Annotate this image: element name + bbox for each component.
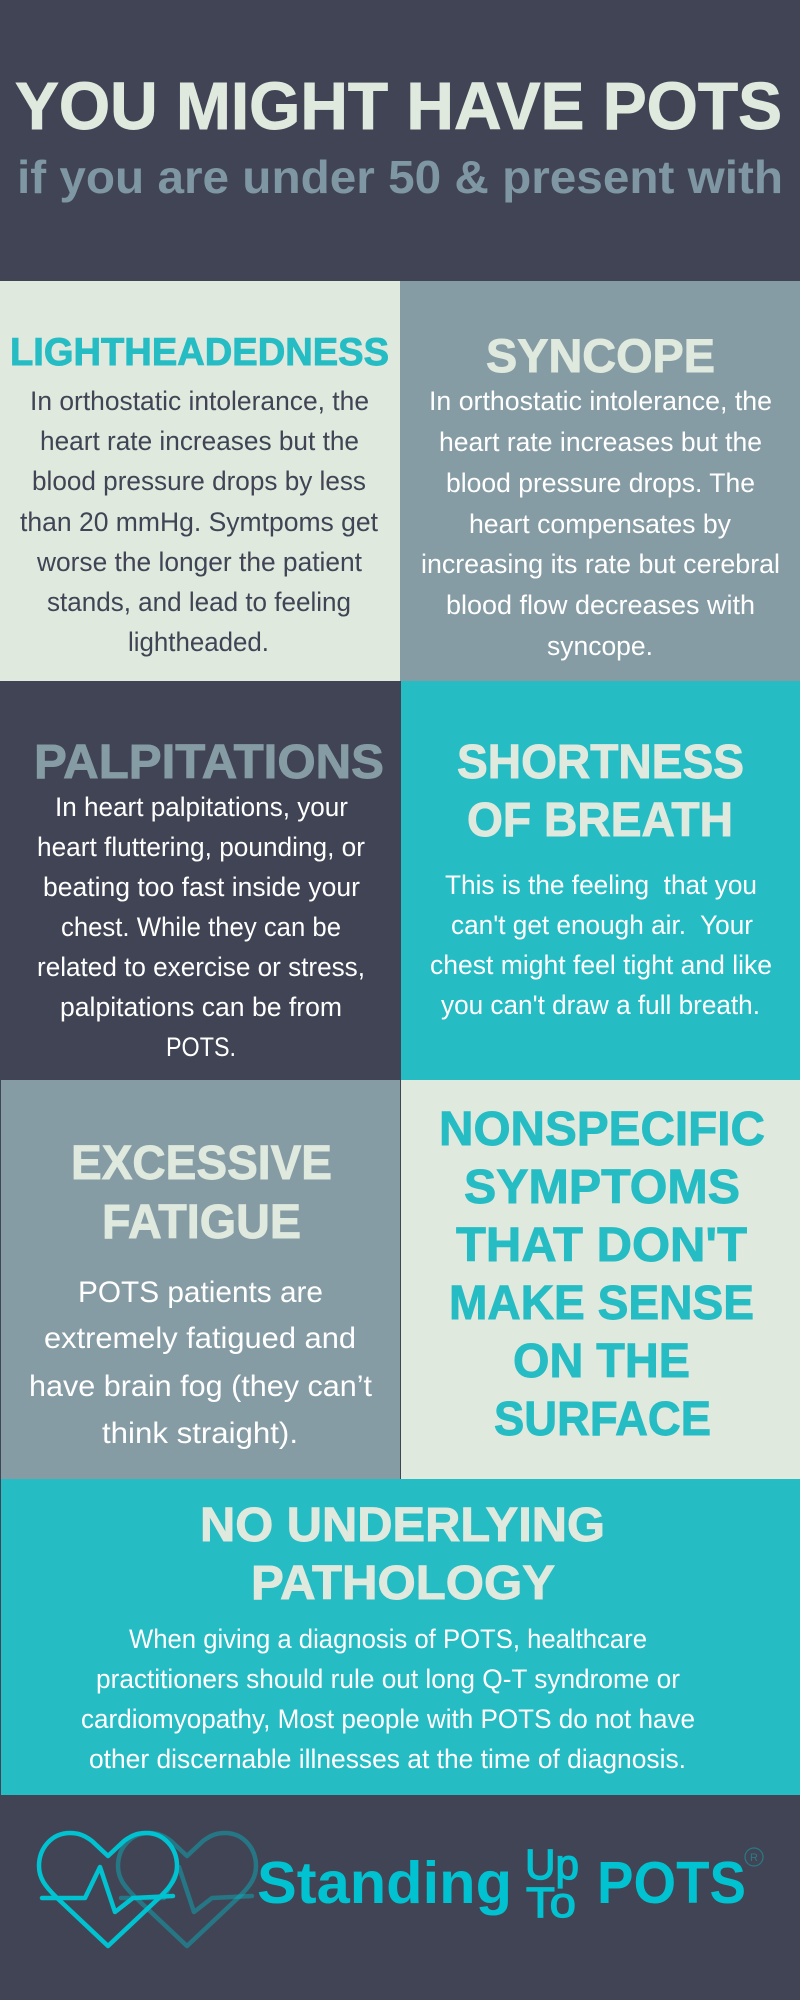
text block: palpitations: POTS. [166,1032,236,1062]
text block: excessive fatigue: extremely fatigued and [44,1322,356,1355]
heading: syncope: SYNCOPE [486,329,715,382]
heading: nonspecific symptoms: SYMPTOMS [464,1161,740,1214]
text block: lightheadedness: blood pressure drops by less [32,466,366,496]
icon: bright heart with pulse [39,1833,177,1946]
text block: syncope: heart compensates by [469,509,731,539]
text block: no underlying pathology: other discernable illnesses at the time of diagnosis. [89,1744,686,1774]
text block: excessive fatigue: think straight). [102,1417,298,1450]
text block: lightheadedness [20,386,378,657]
text block: palpitations: palpitations can be from [60,992,342,1022]
logo wordmark: To [526,1879,576,1927]
text block: shortness of breath: This is the feeling that you [445,870,757,900]
panel: no underlying pathology [1,1479,800,1795]
text block: lightheadedness: heart rate increases but the [40,426,359,456]
text block: palpitations: chest. While they can be [61,912,341,942]
text block: lightheadedness: In orthostatic intolerance, the [30,386,369,416]
logo wordmark [257,1841,746,1927]
registered mark: R [750,1852,758,1864]
heading: excessive fatigue [71,1137,332,1249]
heading: nonspecific symptoms [439,1103,765,1446]
heading: lightheadedness: LIGHTHEADEDNESS [10,331,389,374]
header [15,69,783,203]
heading: excessive fatigue: FATIGUE [102,1196,301,1249]
text block: shortness of breath: chest might feel tight and like [430,950,772,980]
text block: palpitations: related to exercise or stress, [37,952,365,982]
heading: no underlying pathology [200,1499,605,1610]
panel: lightheadedness [0,281,400,681]
text block: shortness of breath [430,870,772,1020]
title: YOU MIGHT HAVE POTS [15,69,782,144]
heading: shortness of breath [457,736,744,847]
text block: syncope: blood flow decreases with [446,590,755,620]
text block: syncope: increasing its rate but cerebral [421,549,780,579]
panel: palpitations [0,681,401,1080]
text block: palpitations: beating too fast inside your [43,872,360,902]
text block: no underlying pathology [81,1624,695,1774]
heading: excessive fatigue: EXCESSIVE [71,1137,332,1190]
heading: nonspecific symptoms: MAKE SENSE [449,1277,754,1330]
heading: nonspecific symptoms: ON THE [513,1335,690,1388]
heading: nonspecific symptoms: THAT DON'T [456,1219,747,1272]
text block: no underlying pathology: When giving a diagnosis of POTS, healthcare [129,1624,647,1654]
heading: nonspecific symptoms: SURFACE [494,1393,711,1446]
text block: syncope: In orthostatic intolerance, the [429,386,772,416]
heading: no underlying pathology: NO UNDERLYING [200,1499,605,1552]
text block: syncope: syncope. [547,631,653,661]
text block: palpitations [37,792,365,1062]
registered mark [745,1848,763,1866]
text block: lightheadedness: stands, and lead to feeling [47,587,351,617]
heading: shortness of breath: SHORTNESS [457,736,744,789]
text block: lightheadedness: worse the longer the patient [36,547,362,577]
logo wordmark: POTS [597,1850,746,1916]
text block: syncope: blood pressure drops. The [446,468,755,498]
text block: no underlying pathology: cardiomyopathy, Most people with POTS do not have [81,1704,695,1734]
text block: syncope: heart rate increases but the [439,427,762,457]
heading: shortness of breath: OF BREATH [467,794,733,847]
icon: faded heart with pulse [118,1833,256,1946]
text block: excessive fatigue: POTS patients are [78,1276,323,1309]
text block: excessive fatigue [29,1276,373,1450]
text block: palpitations: heart fluttering, pounding, or [37,832,365,862]
panel: excessive fatigue [1,1080,400,1479]
text block: no underlying pathology: practitioners should rule out long Q-T syndrome or [96,1664,680,1694]
text block: excessive fatigue: have brain fog (they can’t [29,1370,373,1403]
text block: shortness of breath: can't get enough air. Your [451,910,753,940]
logo: Standing Up To POTS [39,1833,763,1946]
panel: shortness of breath [401,681,800,1080]
panel: syncope [400,281,800,681]
logo wordmark: Standing [257,1850,512,1916]
heading: nonspecific symptoms: NONSPECIFIC [439,1103,765,1156]
heading: palpitations: PALPITATIONS [34,736,384,789]
panel: nonspecific symptoms [401,1080,800,1479]
heading: no underlying pathology: PATHOLOGY [251,1557,555,1610]
text block: shortness of breath: you can't draw a full breath. [441,990,760,1020]
text block: palpitations: In heart palpitations, your [55,792,348,822]
text block: syncope [421,386,780,661]
logo wordmark: Up [525,1841,579,1889]
text block: lightheadedness: than 20 mmHg. Symtpoms get [20,507,378,537]
subtitle: if you are under 50 & present with [17,151,783,203]
text block: lightheadedness: lightheaded. [128,627,269,657]
